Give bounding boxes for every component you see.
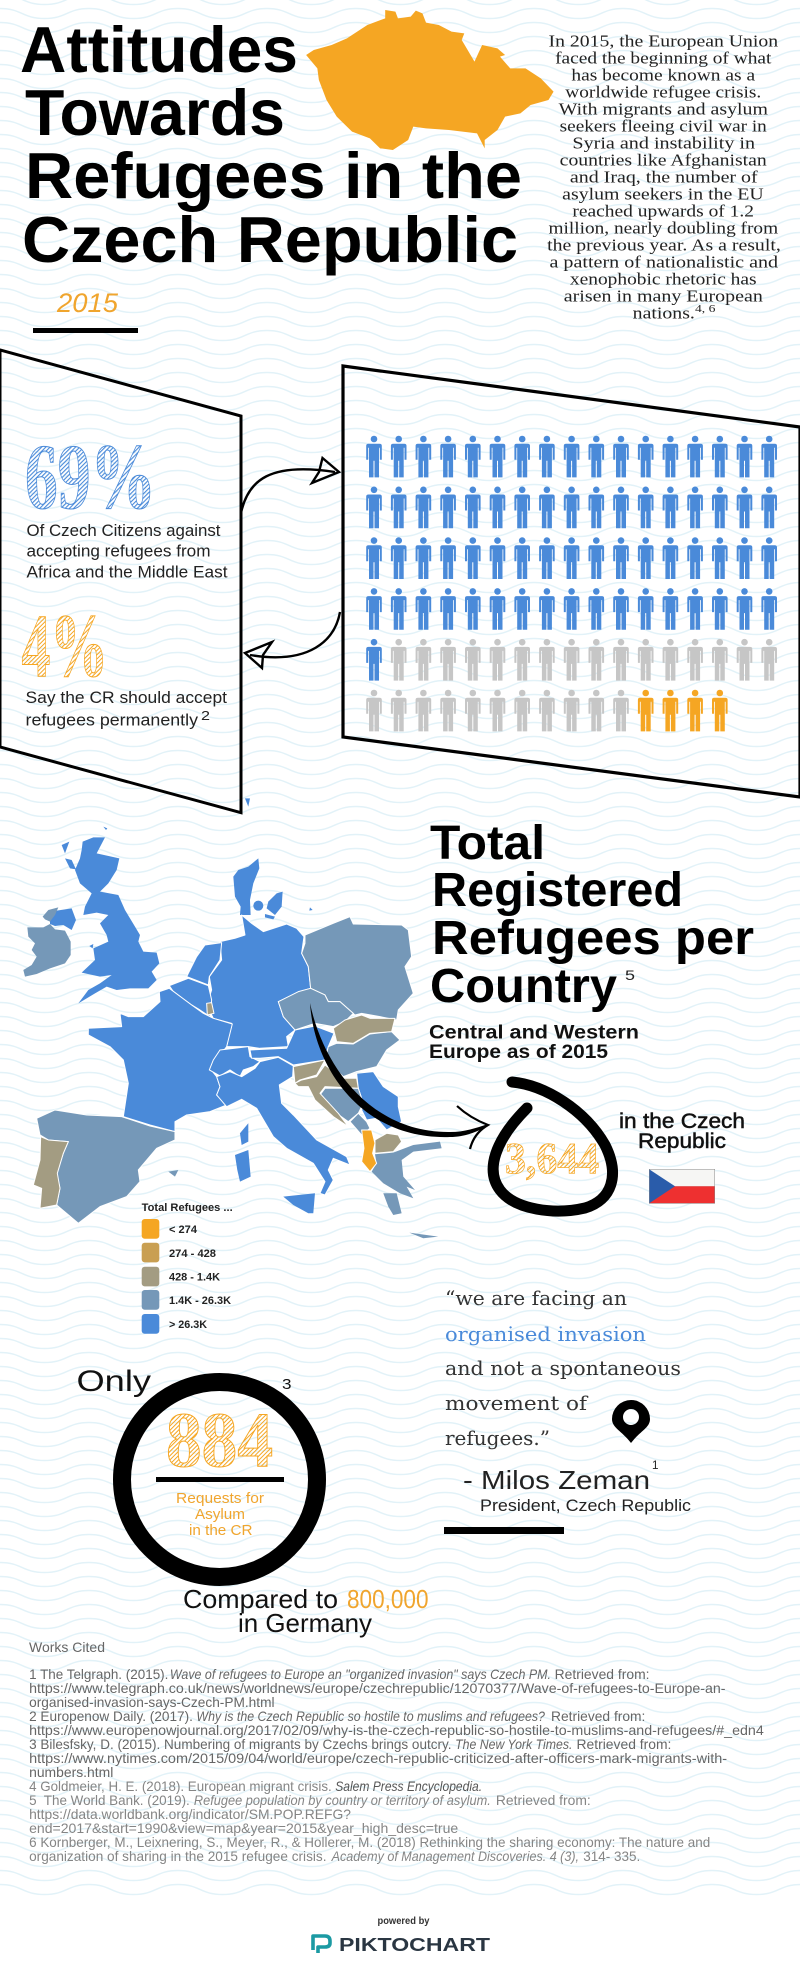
intro paragraph: Syria and instability in — [572, 134, 755, 153]
works cited list: 2 Europenow Daily. (2017). — [29, 1708, 193, 1724]
year label: 2015 — [56, 288, 119, 318]
footer: piktochart logo — [313, 1935, 490, 1955]
quote attribution — [463, 1458, 692, 1515]
title underline — [33, 328, 138, 333]
intro paragraph: has become known as a — [571, 66, 756, 85]
pictogram row 5 — [366, 639, 777, 681]
works cited list: 1 The Telgraph. (2015). — [29, 1666, 168, 1682]
arrow: back to statistics panel — [245, 612, 340, 668]
works cited list: Retrieved from: — [555, 1666, 650, 1682]
quote: organised invasion — [445, 1322, 646, 1346]
works cited list: Retrieved from: — [576, 1736, 671, 1752]
comparison to Germany: Compared to — [183, 1584, 338, 1614]
intro paragraph: With migrants and asylum — [559, 100, 768, 119]
works cited list: Why is the Czech Republic so hostile to muslims and refugees? — [196, 1708, 545, 1724]
comparison to Germany: in Germany — [238, 1608, 372, 1638]
quote: movement of — [445, 1391, 589, 1415]
intro paragraph — [547, 32, 781, 323]
title: Towards — [25, 76, 285, 149]
quote attribution: President, Czech Republic — [480, 1496, 692, 1515]
heading: total registered refugees: 5 — [625, 967, 635, 983]
label: only: 3 — [282, 1376, 292, 1393]
pictogram row 3 — [366, 537, 777, 579]
ring with asylum requests stat — [122, 1382, 317, 1577]
map legend — [142, 1202, 233, 1334]
footer: piktochart logo: PIKTOCHART — [339, 1935, 490, 1955]
ring with asylum requests stat: in the CR — [189, 1522, 253, 1539]
panel: pictogram of people — [343, 366, 800, 797]
icon: Czech flag — [649, 1169, 715, 1204]
works cited list: https://www.europenowjournal.org/2017/02/09/why-is-the-czech-republic-so-hostile-to-muslims-and-refugees/#_edn4 — [29, 1722, 764, 1738]
label: in the Czech Republic — [619, 1110, 745, 1153]
works cited list — [29, 1666, 764, 1864]
intro paragraph: reached upwards of 1.2 — [572, 202, 754, 221]
works cited list: 3 Bilesfsky, D. (2015). Numbering of migrants by Czechs brings outcry. — [29, 1736, 451, 1752]
intro paragraph: xenophobic rhetoric has — [570, 270, 757, 289]
label: in the Czech Republic: in the Czech — [619, 1110, 745, 1133]
map legend: > 26.3K — [169, 1319, 207, 1331]
title: Czech Republic — [22, 203, 518, 276]
text: 4% description: 2 — [201, 708, 210, 723]
heading: total registered refugees: Total — [430, 817, 545, 870]
pictogram row 6 — [366, 690, 728, 731]
works cited list: 4 Goldmeier, H. E. (2018). European migrant crisis. — [29, 1778, 332, 1794]
works cited list: organization of sharing in the 2015 refugee crisis. — [29, 1848, 326, 1864]
title: Attitudes — [20, 13, 298, 86]
heading: total registered refugees: Country — [430, 960, 617, 1013]
icon: Czech Republic map silhouette — [306, 10, 554, 150]
quote: refugees.” — [445, 1426, 550, 1450]
quote: “we are facing an — [445, 1286, 627, 1310]
quote attribution: - Milos Zeman — [463, 1465, 650, 1495]
map legend: 274 - 428 — [169, 1248, 216, 1260]
intro paragraph: seekers fleeing civil war in — [560, 117, 767, 136]
intro paragraph: worldwide refugee crisis. — [565, 83, 761, 102]
intro paragraph: the previous year. As a result, — [547, 236, 781, 255]
intro paragraph: faced the beginning of what — [555, 49, 772, 68]
pictogram row 4 — [366, 588, 777, 630]
works cited list: Academy of Management Discoveries. 4 (3), — [331, 1848, 579, 1864]
ring with asylum requests stat: Requests for — [176, 1490, 264, 1507]
text: 69% description: accepting refugees from — [26, 543, 210, 561]
works cited list: https://www.telegraph.co.uk/news/worldnews/europe/czechrepublic/12070377/Wave-of-refugees-to-Europe-an- — [29, 1680, 726, 1696]
works cited list: Wave of refugees to Europe an "organized invasion" says Czech PM. — [170, 1666, 551, 1682]
works cited list: https://www.nytimes.com/2015/09/04/world/europe/czech-republic-criticized-after-officers-mark-migrants-with- — [29, 1750, 727, 1766]
intro paragraph: In 2015, the European Union — [548, 32, 778, 51]
map legend: Total Refugees ... — [142, 1202, 233, 1214]
intro paragraph: and Iraq, the number of — [570, 168, 758, 187]
panel: poll statistics — [0, 350, 241, 813]
map legend: < 274 — [169, 1224, 198, 1236]
comparison to Germany: 800,000 — [347, 1584, 428, 1614]
works cited list: Salem Press Encyclopedia. — [335, 1778, 482, 1794]
works cited list: organised-invasion-says-Czech-PM.html — [29, 1694, 274, 1710]
text: 4% description: refugees permanently — [26, 712, 199, 730]
pictogram row 2 — [366, 486, 777, 528]
arrow: Czech Republic to count — [310, 1003, 488, 1149]
subheading: Central and Western — [429, 1023, 639, 1044]
heading: total registered refugees: Registered — [432, 864, 683, 917]
intro paragraph: arisen in many European — [564, 287, 763, 306]
text: 4% description — [26, 689, 227, 730]
intro paragraph: a pattern of nationalistic and — [550, 253, 779, 272]
hand-drawn circle with count: 3,644 — [505, 1134, 599, 1183]
intro paragraph: nations. — [633, 304, 695, 323]
quote — [445, 1286, 681, 1450]
works cited list: The New York Times. — [455, 1736, 572, 1752]
arrow: to pictogram panel — [241, 458, 339, 513]
heading: total registered refugees: Refugees per — [432, 912, 754, 965]
works cited list: Refugee population by country or territory of asylum. — [194, 1792, 491, 1808]
works cited list: Retrieved from: — [496, 1792, 591, 1808]
map legend: 428 - 1.4K — [169, 1272, 220, 1284]
works cited list: 6 Kornberger, M., Leixnering, S., Meyer, R., & Hollerer, M. (2018) Rethinking the sharing economy: The nature and — [29, 1834, 710, 1850]
map legend: 1.4K - 26.3K — [169, 1295, 231, 1307]
ring with asylum requests stat: 884 — [166, 1396, 273, 1483]
quote attribution: 1 — [652, 1458, 659, 1472]
stat: 69%: 69% — [25, 426, 156, 529]
text: 69% description — [26, 522, 228, 582]
works cited list: numbers.html — [29, 1764, 113, 1780]
works cited list: 5 The World Bank. (2019). — [29, 1792, 190, 1808]
map of Europe — [23, 798, 442, 1238]
icon: map pin — [612, 1400, 650, 1443]
hand-drawn circle with count — [493, 1082, 612, 1211]
ring with asylum requests stat: Asylum — [195, 1506, 245, 1523]
quote: and not a spontaneous — [445, 1356, 681, 1380]
works cited list: Retrieved from: — [551, 1708, 645, 1724]
works cited list: 314- 335. — [583, 1848, 640, 1864]
text: 69% description: Of Czech Citizens against — [26, 522, 221, 540]
works cited heading: Works Cited — [29, 1639, 105, 1655]
text: 69% description: Africa and the Middle East — [26, 564, 228, 582]
intro paragraph: 4, 6 — [695, 303, 716, 315]
works cited list: end=2017&start=1990&view=map&year=2015&year_high_desc=true — [29, 1820, 458, 1836]
subheading — [429, 1023, 639, 1063]
heading: total registered refugees — [430, 817, 754, 1013]
intro paragraph: asylum seekers in the EU — [562, 185, 764, 204]
quote underline — [444, 1527, 564, 1534]
subheading: Europe as of 2015 — [429, 1042, 608, 1063]
title — [20, 13, 522, 276]
intro paragraph: million, nearly doubling from — [548, 219, 778, 238]
stat: 4%: 4% — [22, 597, 108, 696]
label: only — [76, 1365, 292, 1398]
title: Refugees in the — [25, 139, 522, 212]
comparison to Germany — [183, 1584, 428, 1638]
intro paragraph: countries like Afghanistan — [560, 151, 767, 170]
label: only: Only — [76, 1365, 151, 1398]
label: in the Czech Republic: Republic — [638, 1130, 726, 1153]
pictogram row 1 — [366, 436, 777, 477]
works cited list: https://data.worldbank.org/indicator/SM.POP.REFG? — [29, 1806, 351, 1822]
text: 4% description: Say the CR should accept — [26, 689, 227, 707]
footer: powered by: powered by — [378, 1915, 430, 1927]
Albania — [362, 1130, 377, 1172]
